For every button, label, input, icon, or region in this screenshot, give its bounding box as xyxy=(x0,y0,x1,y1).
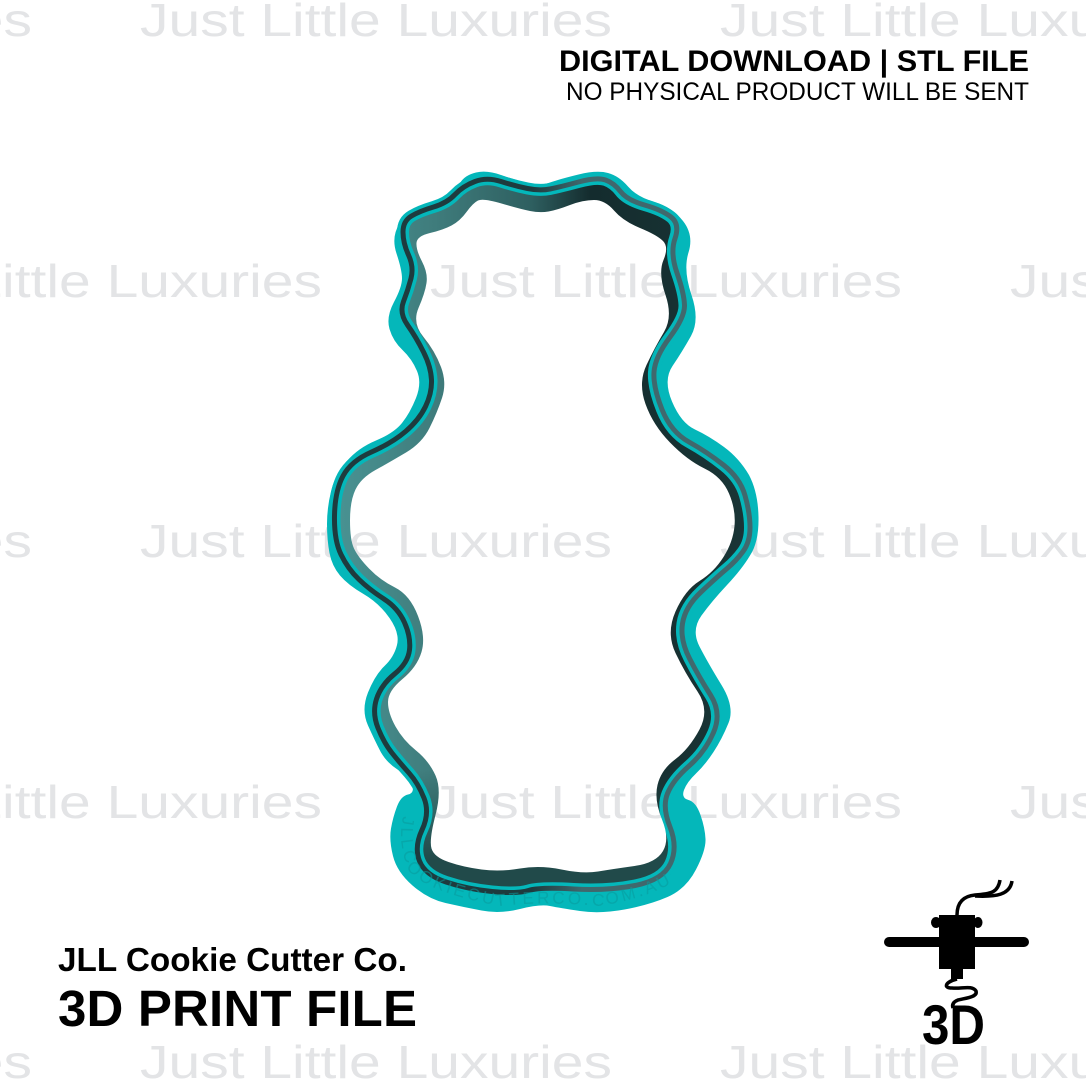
cookie cutter 3D render xyxy=(327,172,759,912)
header: digital download notice: DIGITAL DOWNLOAD | STL FILE xyxy=(559,45,1029,78)
header: digital download notice: NO PHYSICAL PRODUCT WILL BE SENT xyxy=(566,78,1029,106)
header: digital download notice xyxy=(559,45,1029,106)
icon: 3D printer extruder: 3D xyxy=(922,993,985,1056)
brand name: JLL Cookie Cutter Co. xyxy=(58,941,407,978)
watermark: repeated Just Little Luxuries: Just Little Luxuries xyxy=(140,515,612,567)
watermark: repeated Just Little Luxuries: Just Little Luxuries xyxy=(430,255,902,307)
watermark: repeated Just Little Luxuries: Just Little Luxuries xyxy=(430,776,902,828)
embossed maker text on cutter base: JLLCOOKIECUTTERCO.COM.AU xyxy=(401,816,668,906)
icon: 3D printer extruder xyxy=(884,880,1029,1056)
3D print file heading: 3D PRINT FILE xyxy=(58,980,417,1037)
